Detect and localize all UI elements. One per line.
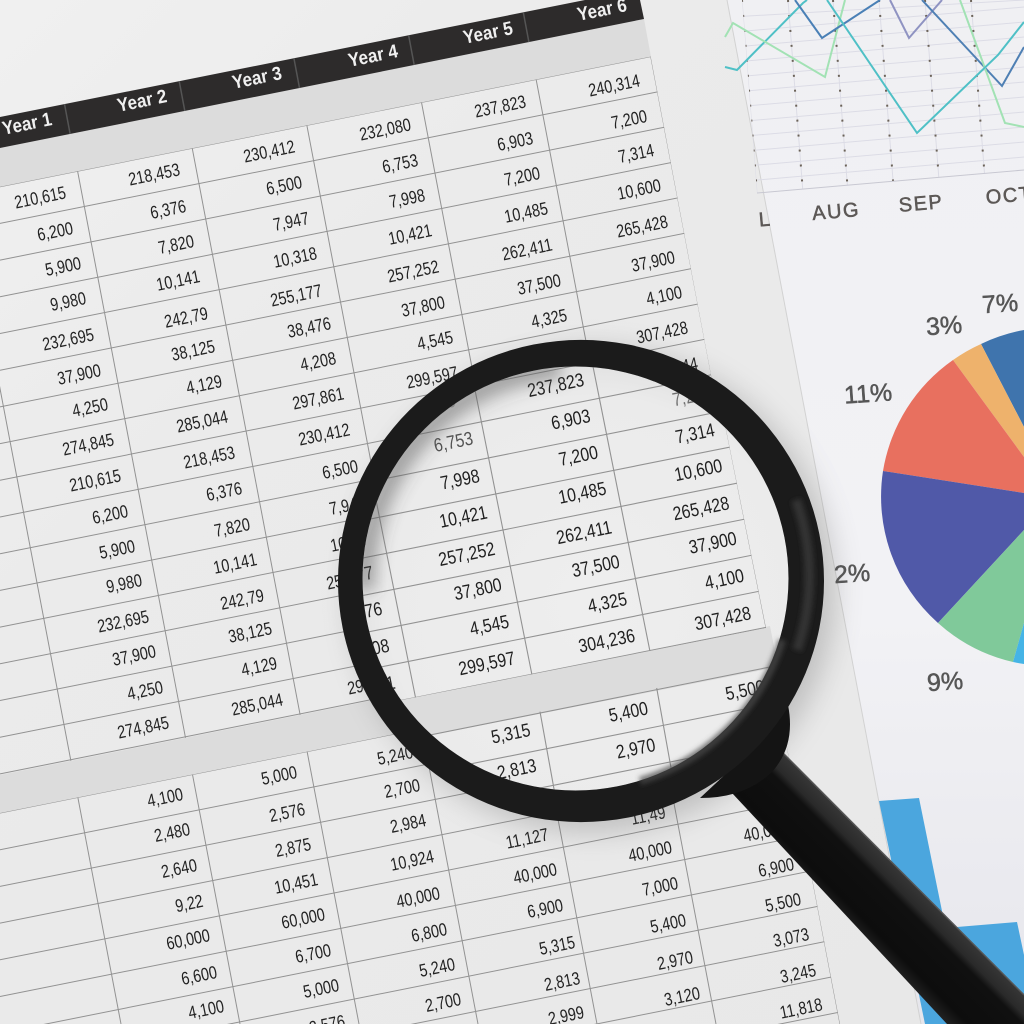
column: year 6 values: 307,428	[635, 318, 690, 348]
column: year 1 values: 274,845	[116, 713, 171, 743]
lens values: 304,236	[577, 624, 637, 657]
column: year 5 values: 4,325	[530, 306, 569, 332]
lens values: 10,421	[437, 501, 489, 532]
column: year 1 values: 210,615	[68, 466, 123, 496]
lens values: 4,325	[586, 588, 629, 617]
column: year 2 values: 242,79	[219, 586, 266, 614]
column: year 1 values: 37,900	[56, 361, 103, 389]
table values: lower table: 5,400	[649, 911, 688, 937]
pie percentage labels	[833, 289, 1019, 697]
column: year 3 values: 297,861	[291, 384, 346, 414]
lens values: 299,597	[457, 647, 517, 680]
lens values: 37,900	[687, 527, 739, 558]
column: year 2 values: 10,141	[212, 550, 259, 578]
column: year 6 values	[587, 71, 700, 384]
column: year 1 values: 210,615	[13, 183, 68, 213]
pie percentage labels: 2%	[833, 559, 871, 589]
lens values: 7,200	[670, 381, 714, 411]
table values: lower table: 11,127	[504, 825, 550, 853]
column: year 2 values: 38,125	[170, 337, 217, 365]
chart axis month labels: SEP	[898, 191, 944, 217]
column: year 1 values: 37,900	[111, 642, 158, 670]
column: year 3 values: 7,947	[328, 493, 367, 519]
table values: lower table: 10,451	[273, 870, 320, 898]
table values: lower table: 40,000	[742, 818, 789, 846]
column: year 6 values: 10,600	[616, 176, 663, 204]
table values: lower table: 5,000	[260, 763, 299, 789]
column: year 4 values: 7,998	[388, 186, 427, 212]
lens values: 3,120	[621, 773, 665, 803]
column: year 1 values: 6,200	[91, 502, 130, 528]
lens values: 2,813	[495, 754, 538, 784]
column: year 6 values: 37,900	[630, 248, 677, 276]
column: year 3 values: 255,177	[325, 564, 380, 594]
column: year 6 values: 4,100	[645, 283, 684, 309]
lens values: 257,252	[437, 538, 497, 570]
column: year 6 values: 240,344	[645, 354, 700, 384]
panel: chart paper	[727, 0, 1024, 1024]
pie chart	[881, 330, 1024, 664]
column: year 4 values	[358, 115, 460, 393]
lens values: 5,400	[607, 697, 650, 726]
column: year 1 values: 9,980	[105, 571, 144, 597]
column: year 1 values: 9,980	[49, 289, 88, 315]
lens paper	[362, 366, 788, 790]
lens values	[434, 373, 762, 780]
table values: lower table: 6,800	[410, 920, 449, 946]
column: year 1 values	[13, 183, 171, 743]
table values: lower table: 60,000	[280, 905, 327, 933]
column: year 4 values: 299,597	[405, 363, 460, 393]
table values: lower table: 2,984	[389, 811, 428, 837]
column: year 3 values: 10,318	[272, 244, 319, 272]
lens values: 7,200	[557, 441, 600, 470]
column: year 3 values	[242, 137, 401, 699]
lens values: 5,500	[723, 675, 767, 705]
lens values: 37,500	[570, 550, 622, 581]
table grid lines: lower	[0, 734, 840, 1024]
lens inner shadow	[365, 368, 560, 590]
column: year 2 values: 218,453	[182, 443, 237, 473]
lens values: 4,545	[468, 610, 511, 640]
lens values: 10,600	[672, 454, 724, 485]
column: year 5 values: 6,903	[496, 129, 535, 155]
column: year 3 values: 230,412	[242, 137, 297, 167]
table values: lower table: 7,000	[641, 874, 680, 900]
column: year 2 values: 285,044	[175, 407, 230, 437]
lens grid upper	[363, 366, 766, 700]
table values: lower table: 2,640	[160, 856, 199, 882]
pie percentage labels: 9%	[926, 667, 964, 697]
column: year 3 values: 6,500	[265, 173, 304, 199]
lens values: 2,970	[614, 734, 657, 763]
lens values: 7,998	[438, 465, 482, 494]
lens section band	[402, 626, 774, 734]
table values: lower table: 40,000	[627, 838, 674, 866]
column: year 6 values: 7,200	[610, 107, 649, 133]
column: year 5 values: 262,411	[500, 235, 554, 265]
table values: lower table: 40,000	[395, 884, 442, 912]
column: year 2 values: 38,125	[227, 619, 274, 647]
lens values: 10,485	[556, 477, 608, 508]
column: year 6 values: 240,314	[587, 71, 642, 101]
table values: lower table: 2,875	[274, 835, 313, 861]
table values: lower table: 11,818	[778, 995, 824, 1023]
magnifying glass collar	[700, 705, 790, 798]
column: year 3 values: 10,318	[329, 528, 376, 556]
table values: lower table: 10,924	[389, 847, 436, 875]
table values: lower table: 2,700	[424, 990, 463, 1016]
column: year 5 values: 237,823	[473, 92, 528, 122]
column: year 1 values: 4,250	[126, 678, 165, 704]
table values: lower table: 6,600	[180, 963, 219, 989]
table values: lower table: 4,100	[187, 997, 226, 1023]
magnified lens view	[362, 366, 788, 790]
lens cut-off values at left: 38,476	[332, 597, 384, 628]
lens cut-off values at left: 255,177	[315, 561, 375, 594]
table values: lower table: 3,245	[779, 961, 818, 987]
line chart	[725, 0, 1024, 196]
table values: lower table: 2,480	[153, 820, 192, 846]
column: year 1 values: 4,250	[71, 395, 110, 421]
table values: lower table: 2,576	[268, 800, 307, 826]
table values: lower table: 3,120	[663, 984, 702, 1010]
lens values: 262,411	[554, 516, 614, 549]
table values: lower table: 5,000	[302, 976, 341, 1002]
lens values: 7,314	[673, 419, 717, 448]
chart axis month labels: L	[758, 208, 772, 232]
lens values: 307,428	[693, 602, 753, 635]
lens drop shadow	[349, 347, 835, 833]
column: year 5 values: 37,500	[516, 271, 563, 299]
table values: lower table: 2,970	[656, 948, 695, 974]
lens cut-off values at left: 297,861	[337, 671, 397, 704]
lens values: 37,800	[452, 573, 504, 604]
table values: lower table: 5,240	[376, 743, 415, 769]
column: year 3 values: 255,177	[269, 281, 324, 311]
pie percentage labels: 3%	[925, 311, 963, 341]
magnifying glass handle	[732, 750, 1024, 1024]
magnifying glass ring	[338, 340, 824, 822]
column: year 4 values: 37,800	[400, 293, 447, 321]
column: year 1 values: 5,900	[44, 254, 83, 280]
lens grid lower	[431, 666, 769, 790]
lens values: 6,753	[432, 427, 475, 456]
table header bar: Year 1	[0, 108, 54, 139]
column: year 4 values: 6,753	[381, 151, 420, 177]
table values: lower table: 3,073	[772, 925, 811, 951]
column: year 3 values: 38,476	[286, 314, 333, 342]
table header bar	[0, 0, 644, 148]
column: year 4 values: 232,080	[358, 115, 413, 145]
table values: lower table: 40,000	[512, 860, 559, 888]
table values: lower table: 11,49	[629, 803, 667, 829]
column: year 2 values: 7,820	[157, 232, 196, 258]
column: year 1 values: 5,900	[98, 537, 137, 563]
column: year 3 values: 6,500	[321, 457, 360, 483]
column: year 1 values: 232,695	[96, 607, 151, 637]
column: year 3 values: 297,861	[346, 669, 401, 699]
table values: lower table: 2,813	[543, 969, 582, 995]
table values: lower table: 6,700	[294, 941, 333, 967]
column: year 3 values: 4,208	[299, 349, 338, 375]
column: year 1 values: 274,845	[61, 430, 116, 460]
column: year 4 values: 10,421	[387, 221, 434, 249]
table values: lower table	[146, 743, 824, 1024]
lens values: 265,428	[671, 492, 731, 525]
lens values: 6,903	[549, 405, 592, 434]
column: year 6 values: 265,428	[615, 212, 670, 242]
table values: lower table: 5,240	[418, 955, 457, 981]
table header bar: Year 4	[346, 40, 400, 71]
lens cut-off values at left	[364, 566, 396, 689]
chart axis month labels	[758, 183, 1024, 232]
column: year 6 values: 7,314	[617, 141, 656, 167]
bar chart	[879, 798, 1024, 1024]
lens values: 6,800	[414, 389, 458, 419]
column: year 1 values: 232,695	[41, 325, 96, 355]
column: year 2 values: 4,129	[185, 372, 224, 398]
table values: lower table: 5,315	[538, 933, 577, 959]
column: year 2 values: 7,820	[213, 515, 252, 541]
table values: lower table: 60,000	[165, 926, 212, 954]
pie percentage labels: 7%	[981, 289, 1019, 319]
column: year 5 values	[473, 92, 569, 332]
table header bar: Year 5	[461, 17, 515, 48]
lens values: 4,100	[703, 564, 746, 594]
column: year 2 values: 6,376	[149, 197, 188, 223]
column: year 2 values: 218,453	[127, 160, 182, 190]
column: year 5 values: 7,200	[503, 164, 542, 190]
table header bar: Year 3	[230, 62, 284, 93]
column: year 2 values	[127, 160, 285, 720]
column: year 2 values: 6,376	[205, 479, 244, 505]
column: year 1 values: 6,200	[36, 219, 75, 245]
table values: upper table	[13, 71, 700, 743]
table grid lines: upper	[0, 56, 712, 774]
lens values: 5,315	[489, 719, 532, 748]
table values: lower table: 6,900	[757, 855, 796, 881]
column: year 3 values: 230,412	[297, 420, 352, 450]
table header bar: Year 2	[115, 85, 169, 116]
column: year 2 values: 285,044	[230, 690, 285, 720]
column: year 5 values: 10,485	[503, 199, 550, 227]
table values: lower table: 6,900	[526, 896, 565, 922]
table values: lower table: 4,100	[146, 785, 185, 811]
chart axis month labels: AUG	[811, 199, 861, 225]
lens values: 237,823	[526, 369, 586, 401]
column: year 2 values: 10,141	[155, 267, 202, 295]
table values: lower table: 2,700	[383, 776, 422, 802]
column: year 4 values: 4,545	[416, 328, 455, 354]
lens cut-off values at left: 4,208	[348, 634, 391, 664]
pie percentage labels: 11%	[843, 378, 893, 410]
table values: lower table: 9,22	[173, 891, 205, 917]
column: year 2 values: 4,129	[240, 654, 279, 680]
table values: lower table: 5,500	[764, 890, 803, 916]
column: year 4 values: 257,252	[386, 257, 441, 287]
column: year 3 values: 7,947	[272, 209, 311, 235]
column: year 2 values: 242,79	[163, 304, 210, 332]
table section bands	[0, 19, 770, 813]
